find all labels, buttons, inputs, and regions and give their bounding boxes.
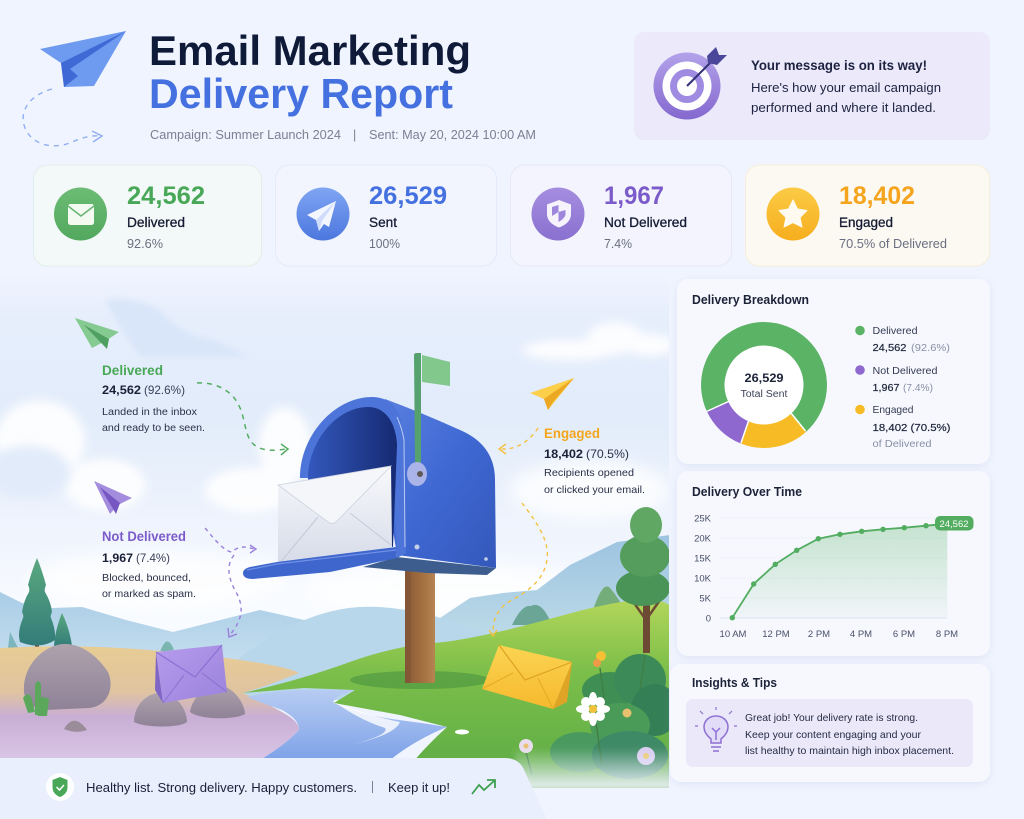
stat card: sent: Sent bbox=[369, 215, 397, 230]
green hill bbox=[243, 600, 670, 800]
legend: Engaged bbox=[872, 404, 914, 416]
purple envelope bbox=[155, 645, 227, 703]
donut chart bbox=[706, 334, 815, 443]
yellow envelope bbox=[482, 645, 572, 709]
title: Email Marketing bbox=[149, 27, 471, 74]
y axis labels: 5K bbox=[699, 594, 712, 604]
y axis labels: 15K bbox=[694, 554, 712, 564]
callout text: performed and where it landed. bbox=[751, 100, 936, 115]
callout: not delivered: Blocked, bounced, bbox=[102, 572, 191, 584]
icon: light bulb bbox=[695, 707, 737, 751]
icon: trend arrow bbox=[472, 780, 495, 794]
mailbox door tray bbox=[243, 547, 397, 579]
flag bbox=[414, 353, 450, 463]
left pine trees bbox=[8, 558, 72, 656]
bottom fade bbox=[512, 750, 669, 788]
header paper plane bbox=[23, 31, 126, 146]
icon: green paper plane bbox=[75, 318, 119, 349]
arrows: not delivered path bbox=[205, 528, 256, 637]
y axis labels: 20K bbox=[694, 534, 712, 544]
stat card: engaged: 18,402 bbox=[839, 182, 915, 210]
stat card: not delivered bbox=[510, 165, 732, 266]
legend: Not Delivered bbox=[872, 365, 938, 377]
campaign subtitle: Campaign: Summer Launch 2024 bbox=[150, 128, 341, 142]
panel: insights and tips: Insights & Tips bbox=[692, 676, 777, 690]
callout text: Your message is on its way! bbox=[751, 58, 927, 73]
legend bbox=[855, 325, 950, 450]
value tag bbox=[935, 516, 974, 530]
illustrated landscape scene bbox=[0, 296, 669, 788]
stat card: sent: 100% bbox=[369, 237, 400, 251]
y axis labels bbox=[694, 514, 712, 624]
panel: delivery over time: Delivery Over Time bbox=[692, 485, 802, 499]
callout text: Here's how your email campaign bbox=[751, 80, 941, 95]
campaign subtitle: Sent: May 20, 2024 10:00 AM bbox=[369, 128, 536, 142]
icon: shield badge bbox=[46, 773, 74, 801]
panel: insights and tips: list healthy to maintain high inbox placement. bbox=[745, 745, 954, 757]
stat card: engaged bbox=[746, 165, 990, 266]
background trees bbox=[160, 586, 620, 652]
x axis labels bbox=[720, 629, 958, 640]
legend: 24,562 bbox=[872, 342, 907, 354]
stat card: not delivered: Not Delivered bbox=[604, 215, 687, 230]
panel: delivery breakdown bbox=[677, 279, 990, 464]
panel: insights and tips: Great job! Your delivery rate is strong. bbox=[745, 712, 918, 724]
callout: delivered: 24,562 bbox=[102, 383, 141, 397]
stat card: delivered bbox=[34, 165, 262, 266]
panel: delivery breakdown: Delivery Breakdown bbox=[692, 293, 809, 307]
icon: purple paper plane bbox=[94, 481, 132, 514]
icon: yellow paper plane bbox=[530, 378, 574, 410]
white envelope bbox=[278, 466, 392, 565]
title: Delivery Report bbox=[149, 70, 453, 117]
callout: delivered: and ready to be seen. bbox=[102, 422, 205, 434]
x axis labels: 4 PM bbox=[850, 629, 872, 640]
foreground bushes and flowers bbox=[455, 651, 679, 779]
legend: 1,967 bbox=[872, 382, 900, 394]
icon: paper plane bbox=[296, 188, 350, 240]
arrows: engaged path bbox=[489, 428, 547, 636]
message callout panel bbox=[634, 32, 990, 140]
callout: not delivered: Not Delivered bbox=[102, 529, 186, 544]
post bbox=[405, 562, 435, 683]
callout: delivered: Landed in the inbox bbox=[102, 406, 198, 418]
y axis labels: 25K bbox=[694, 514, 712, 524]
legend: of Delivered bbox=[872, 438, 932, 450]
stat card: engaged: 70.5% of Delivered bbox=[839, 237, 947, 251]
callout: not delivered: (7.4%) bbox=[136, 551, 170, 565]
stat card: not delivered: 1,967 bbox=[604, 182, 664, 210]
icon: shield bbox=[532, 188, 584, 240]
rocks and cactus bbox=[23, 644, 245, 732]
right tree bbox=[616, 507, 670, 653]
callout: engaged: or clicked your email. bbox=[544, 484, 645, 496]
y axis labels: 0 bbox=[706, 614, 711, 624]
footer banner: Keep it up! bbox=[388, 780, 450, 795]
footer banner bbox=[0, 758, 547, 819]
line chart bbox=[694, 514, 974, 640]
footer banner: Healthy list. Strong delivery. Happy customers. bbox=[86, 780, 357, 795]
x axis labels: 6 PM bbox=[893, 629, 915, 640]
callout: engaged: 18,402 bbox=[544, 447, 583, 461]
x axis labels: 2 PM bbox=[808, 629, 830, 640]
icon: envelope bbox=[54, 188, 107, 240]
callout: delivered: Delivered bbox=[102, 363, 163, 378]
donut chart: 26,529 bbox=[744, 371, 784, 385]
callout: engaged: (70.5%) bbox=[586, 447, 629, 461]
sand bank bbox=[0, 646, 299, 760]
callout: engaged: Engaged bbox=[544, 426, 600, 441]
callout text bbox=[751, 58, 941, 115]
campaign subtitle: | bbox=[353, 128, 356, 142]
mailbox illustration bbox=[243, 353, 496, 683]
stat card: not delivered: 7.4% bbox=[604, 237, 632, 251]
value tag: 24,562 bbox=[939, 519, 969, 530]
callout: engaged bbox=[489, 378, 645, 636]
campaign subtitle bbox=[150, 128, 536, 142]
stat card: delivered: 92.6% bbox=[127, 237, 163, 251]
legend: (7.4%) bbox=[903, 382, 933, 394]
y axis labels: 10K bbox=[694, 574, 712, 584]
legend: 18,402 (70.5%) bbox=[872, 422, 950, 434]
river bbox=[247, 690, 447, 760]
panel: insights and tips bbox=[670, 664, 990, 782]
icon: star bbox=[766, 188, 820, 240]
stat card: delivered: Delivered bbox=[127, 215, 185, 230]
stat card: delivered: 24,562 bbox=[127, 182, 205, 210]
stat card: engaged: Engaged bbox=[839, 215, 893, 230]
panel: delivery over time bbox=[677, 471, 990, 656]
callout: not delivered: 1,967 bbox=[102, 551, 133, 565]
x axis labels: 8 PM bbox=[936, 629, 958, 640]
callout: delivered bbox=[75, 318, 288, 455]
legend: Delivered bbox=[872, 325, 918, 337]
donut chart: Total Sent bbox=[740, 389, 788, 400]
callout: delivered: (92.6%) bbox=[144, 383, 185, 397]
x axis labels: 12 PM bbox=[762, 629, 790, 640]
arrow: delivered to mailbox bbox=[197, 383, 288, 455]
title bbox=[149, 27, 471, 117]
stat card: sent: 26,529 bbox=[369, 182, 447, 210]
callout: not delivered: or marked as spam. bbox=[102, 588, 196, 600]
callout: not delivered bbox=[94, 481, 256, 637]
stat card: sent bbox=[276, 165, 496, 266]
x axis labels: 10 AM bbox=[720, 629, 747, 640]
flag pivot bbox=[407, 462, 427, 486]
panel: insights and tips: Keep your content engaging and your bbox=[745, 729, 921, 741]
mailbox body bbox=[380, 399, 496, 568]
legend: (92.6%) bbox=[911, 342, 950, 354]
icon: target with dart bbox=[654, 47, 727, 120]
callout: engaged: Recipients opened bbox=[544, 467, 634, 479]
